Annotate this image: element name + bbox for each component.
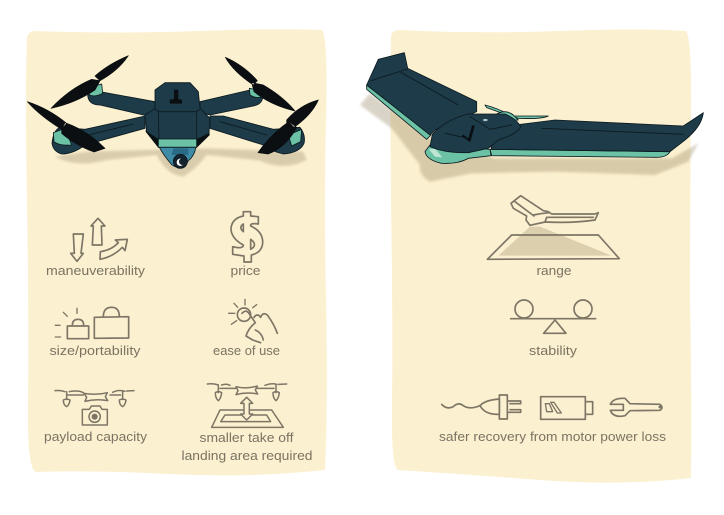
icon: wrench (610, 398, 662, 416)
camera lens (173, 154, 187, 168)
icon: plug (442, 395, 521, 419)
rear left propeller (51, 56, 128, 108)
item: price (230, 212, 263, 278)
label: price (230, 263, 260, 278)
right wing mint edge (490, 149, 670, 157)
item: range (487, 196, 619, 278)
coverage cone (498, 227, 612, 256)
item: smaller take off landing area (182, 384, 312, 463)
mint band (158, 139, 197, 147)
nose mint (425, 145, 491, 163)
wing shadow (360, 93, 698, 182)
icon: dollar sign (231, 212, 263, 262)
item: ease of use (213, 299, 280, 358)
item: safer recovery (439, 395, 667, 444)
body T mark (170, 90, 182, 103)
front left arm (52, 116, 145, 154)
rear left arm (88, 84, 155, 116)
label: range (536, 263, 572, 278)
front right propeller (258, 100, 318, 154)
icon: tapping hand (229, 299, 277, 343)
propeller (485, 105, 548, 120)
illustration: fixed wing drone (360, 53, 703, 182)
label: maneuverability (46, 263, 146, 278)
panel: multirotor (26, 29, 327, 475)
front right arm (210, 116, 304, 154)
right wing (488, 113, 703, 152)
icon: battery (541, 397, 593, 419)
icon: balance scale (511, 300, 596, 333)
panel: fixed wing (390, 30, 691, 483)
drone shadow (55, 148, 307, 177)
left wing mint edge (367, 85, 431, 139)
label: smaller take off (200, 430, 294, 445)
icon: arrows (71, 218, 127, 261)
left wing (367, 53, 477, 135)
icon: drone over landing pad (207, 384, 287, 427)
front left propeller (27, 102, 105, 152)
rear right propeller (225, 57, 295, 111)
icon: drone with camera (55, 390, 134, 425)
rear right arm (200, 88, 263, 115)
item: maneuverability (46, 218, 146, 278)
label: ease of use (213, 343, 280, 358)
fuselage V mark (462, 126, 474, 142)
gimbal (159, 147, 196, 168)
label line 2: landing area required (182, 448, 312, 463)
label: stability (529, 343, 578, 358)
label: payload capacity (44, 429, 148, 444)
item: payload capacity (44, 390, 148, 444)
item: stability (511, 300, 596, 358)
illustration: quadcopter drone (27, 56, 318, 177)
fuselage (430, 114, 521, 153)
drone body (145, 83, 210, 168)
item: size/portability (50, 307, 141, 358)
label: size/portability (50, 343, 141, 358)
icon: wing over terrain (487, 196, 619, 259)
label: safer recovery from motor power loss (439, 429, 667, 444)
icon: small and large bags (55, 307, 129, 339)
